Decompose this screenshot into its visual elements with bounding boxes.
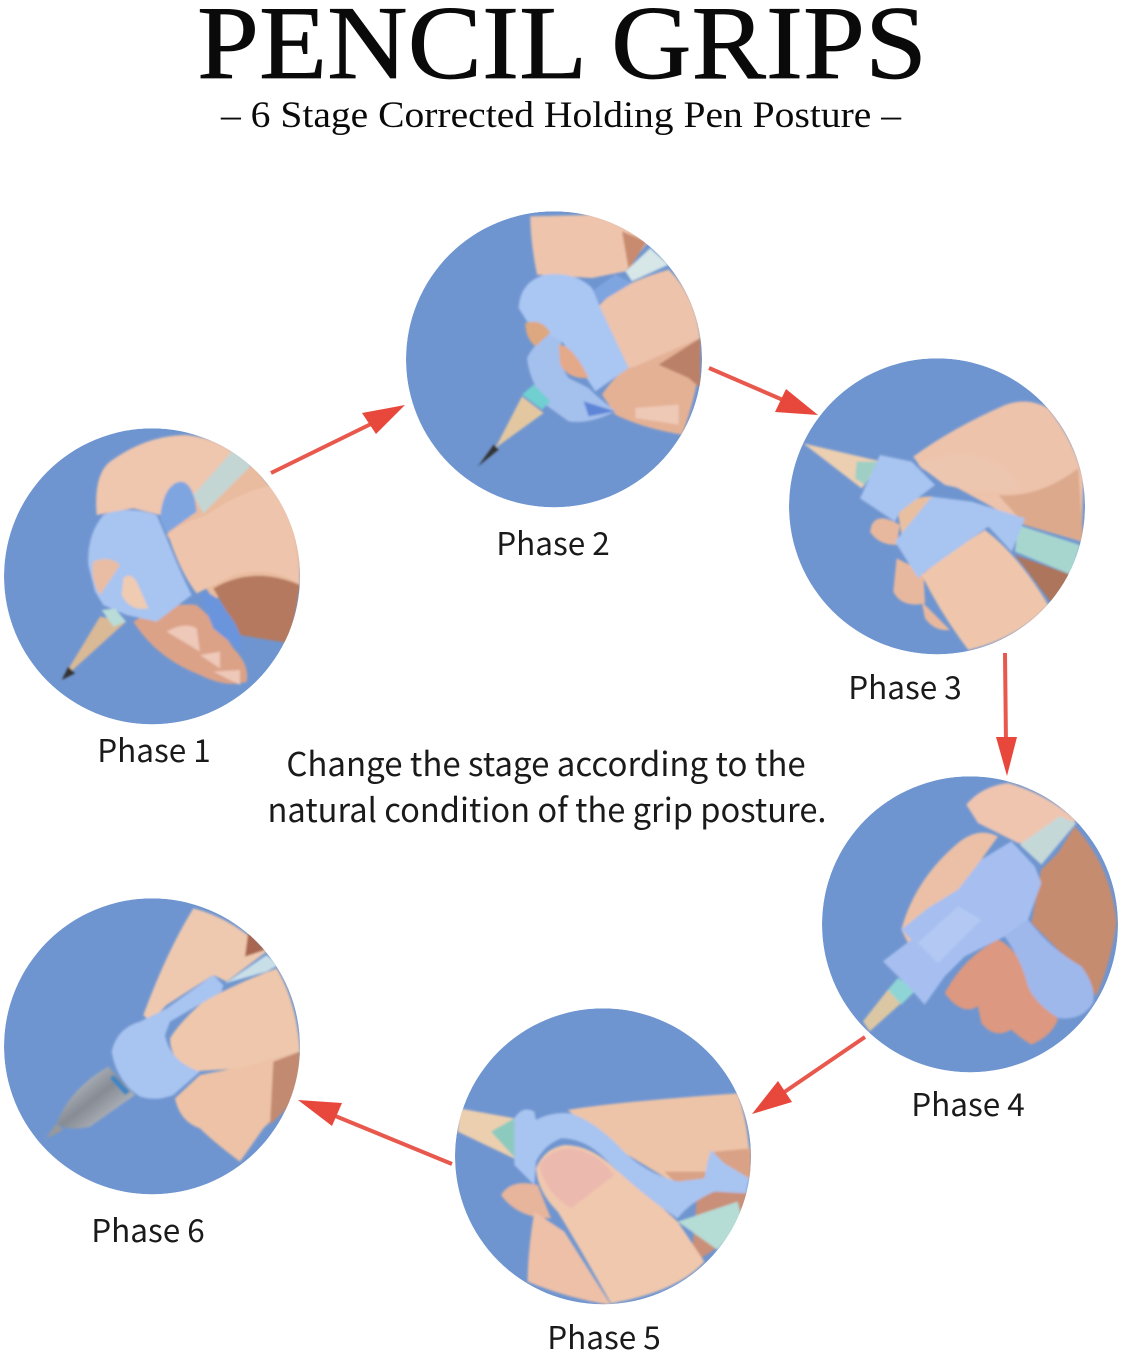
caption: Change the stage according to the [286, 738, 806, 786]
arrow: phase 3 to 4 [996, 653, 1017, 776]
panel: phase 4 [822, 776, 1118, 1072]
panel: phase 1 [4, 428, 300, 724]
label: phase 4: Phase 4 [911, 1080, 1025, 1126]
panel: phase 2 [406, 211, 702, 507]
arrow: phase 2 to 3 [709, 368, 818, 415]
arrow: phase 1 to 2 [271, 405, 405, 473]
label: phase 3: Phase 3 [848, 663, 962, 709]
panel: phase 6 [4, 898, 300, 1194]
arrow: phase 4 to 5 [752, 1037, 865, 1114]
arrow: phase 5 to 6 [298, 1100, 452, 1164]
label: phase 1: Phase 1 [97, 726, 211, 772]
label: phase 2: Phase 2 [496, 519, 610, 565]
caption: natural condition of the grip posture. [268, 784, 826, 832]
subtitle: – 6 Stage Corrected Holding Pen Posture – [220, 95, 902, 136]
caption [268, 738, 826, 832]
panel: phase 5 [455, 1008, 751, 1305]
label: phase 6: Phase 6 [91, 1206, 205, 1252]
panel: phase 3 [789, 358, 1085, 654]
